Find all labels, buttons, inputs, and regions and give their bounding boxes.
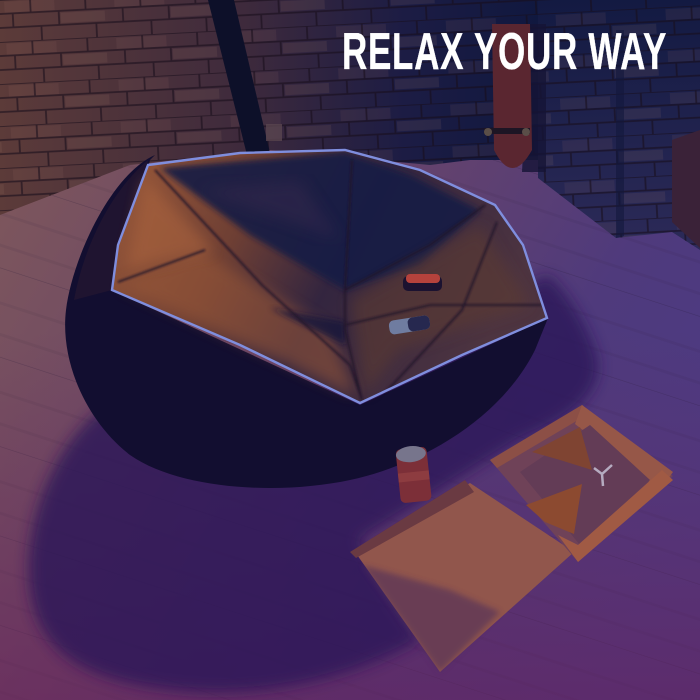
bean bag top surface [112,150,547,403]
bean bag body [65,155,548,488]
shadow of bean bag on floor [29,275,598,693]
pizza saver [594,465,612,486]
blue game controller [388,315,431,335]
dark centre shading [160,152,480,290]
skateboard [484,24,546,172]
box lid [355,483,574,672]
soda can [395,444,432,503]
bean bag chair [65,150,548,488]
dark pole [208,0,270,155]
piping edge [112,150,547,403]
pizza slice, top [532,427,592,470]
red game controller [403,274,442,291]
seams [118,160,542,400]
pizza slice, bottom [526,484,582,534]
wall socket [266,124,282,141]
brick wall, right corner [538,0,700,250]
brick wall, left [0,0,540,215]
box base [490,405,673,562]
open pizza box [350,405,673,672]
